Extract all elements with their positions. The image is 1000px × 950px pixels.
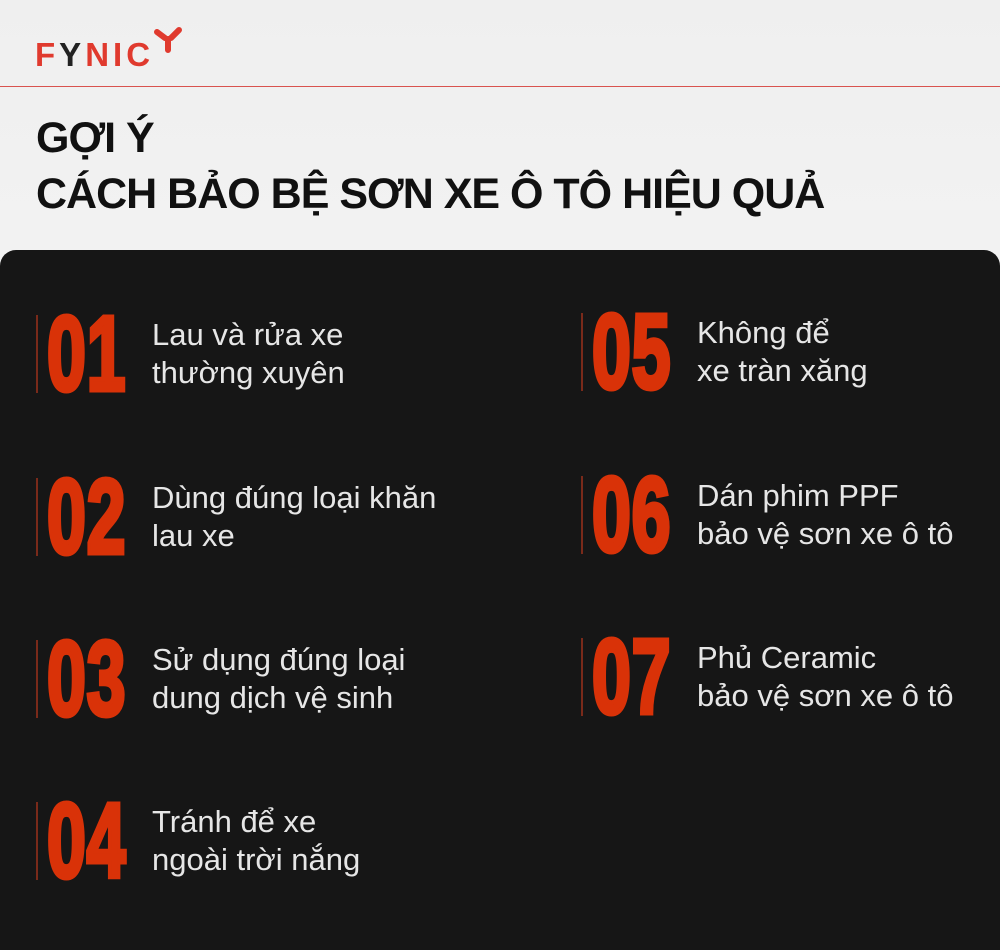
logo [35,27,182,73]
item 01 [36,295,345,413]
panel: tips: Không để [697,315,830,350]
item 04 [36,782,360,900]
panel: tips: Sử dụng đúng loại [152,642,405,677]
panel: tips: bảo vệ sơn xe ô tô [697,678,953,713]
panel: tips: 01 [47,295,126,413]
item 03 [36,620,405,738]
title: CÁCH BẢO BỆ SƠN XE Ô TÔ HIỆU QUẢ [36,170,824,218]
panel: tips: lau xe [152,518,235,553]
panel: tips: Dùng đúng loại khăn [152,480,436,515]
title: GỢI Ý [36,114,154,162]
item 05 [581,293,868,411]
item 07 [581,618,953,736]
panel: tips: 06 [592,456,671,574]
panel: tips: Phủ Ceramic [697,640,876,675]
panel: tips: Lau và rửa xe [152,317,343,352]
panel: tips: thường xuyên [152,355,345,390]
panel: tips: Dán phim PPF [697,478,899,513]
panel: tips: 02 [47,458,126,576]
panel: tips: 04 [47,782,126,900]
panel: tips: bảo vệ sơn xe ô tô [697,516,953,551]
item 02 [36,458,436,576]
panel: tips: xe tràn xăng [697,353,868,388]
panel: tips: Tránh để xe [152,804,316,839]
panel: tips: 07 [592,618,671,736]
panel: tips: ngoài trời nắng [152,842,360,877]
panel: tips [0,250,1000,950]
panel: tips: 03 [47,620,126,738]
panel: tips: 05 [592,293,671,411]
item 06 [581,456,953,574]
panel: tips: dung dịch vệ sinh [152,680,393,715]
logo: FYNIC [35,36,154,73]
title [36,114,824,218]
